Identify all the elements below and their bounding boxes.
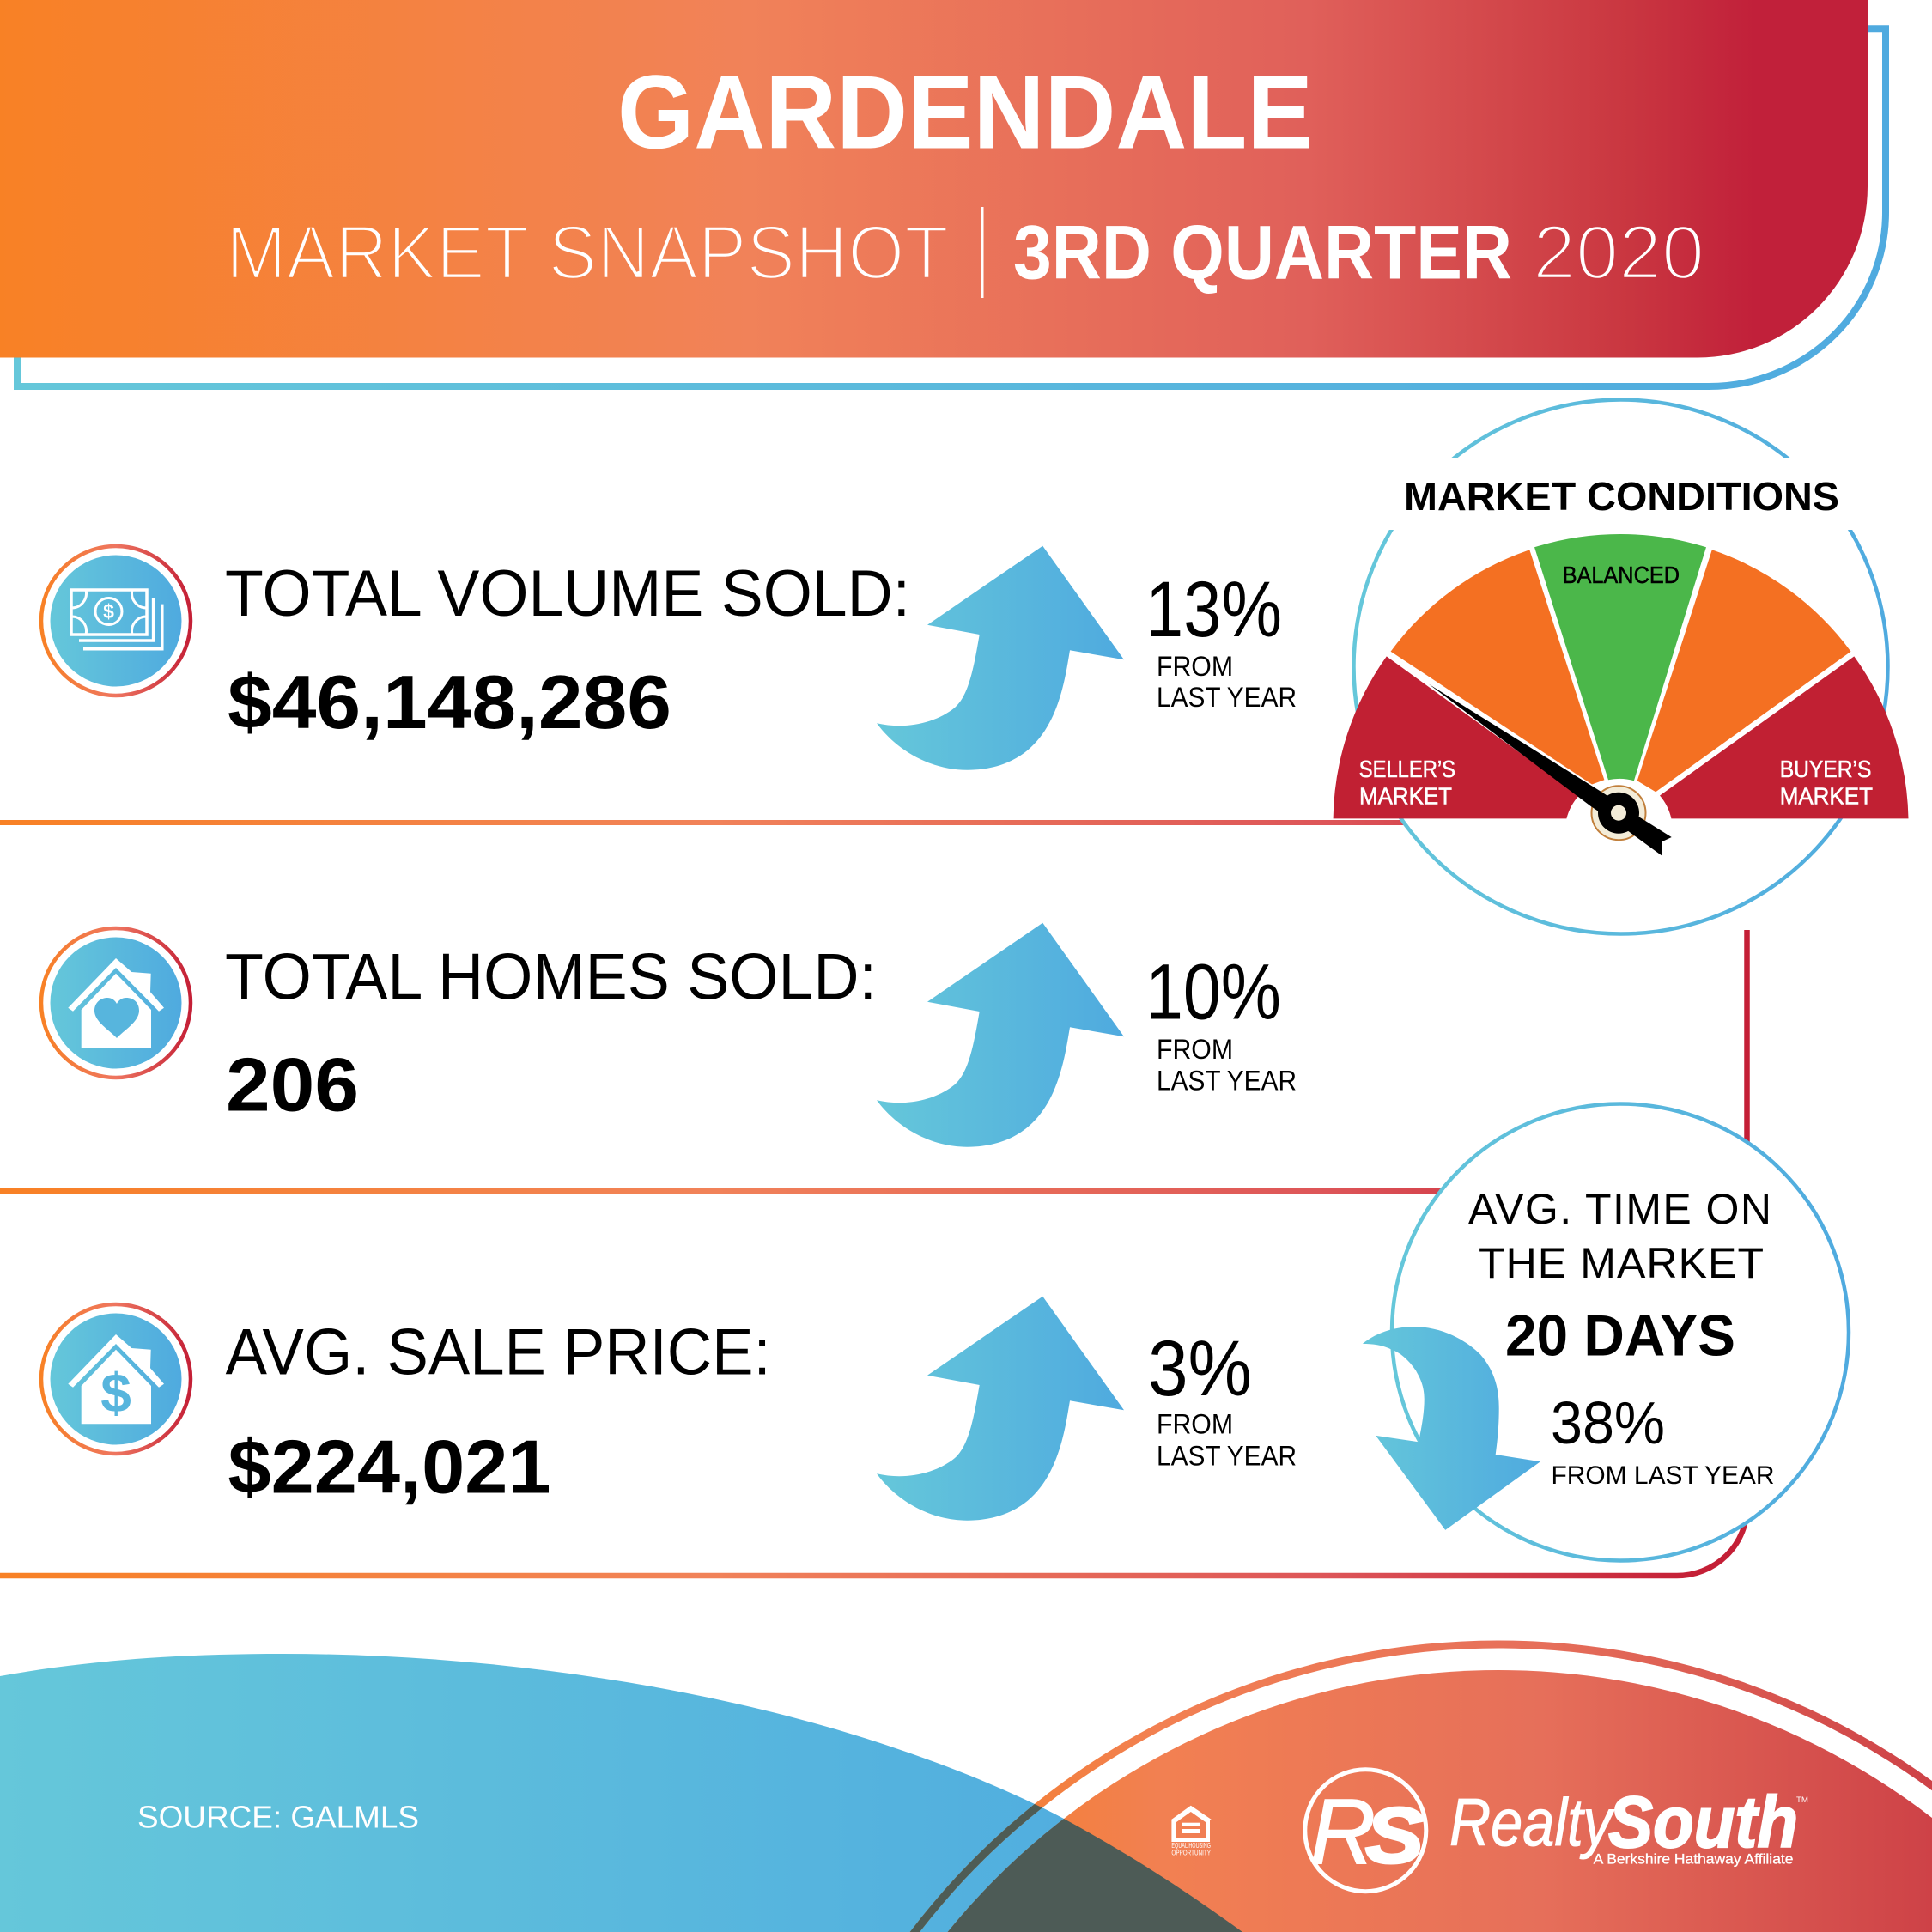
note: from last year bbox=[1157, 651, 1297, 713]
title: GARDENDALE bbox=[617, 53, 1313, 170]
icon: equal housing opportunity: EQUAL HOUSING bbox=[1171, 1842, 1211, 1850]
logo: RealtySouth: Realty bbox=[1449, 1784, 1614, 1860]
gauge ring bbox=[1353, 400, 1887, 934]
header outline: blue frame bbox=[17, 28, 1886, 386]
gauge segment: buyer's market bbox=[1660, 656, 1908, 818]
icon: house with dollar bbox=[41, 1304, 191, 1454]
row: total volume sold bbox=[41, 546, 1297, 770]
note: from last year: LAST YEAR bbox=[1157, 682, 1297, 713]
arrow: up bbox=[877, 1297, 1124, 1521]
logo: RealtySouth: S bbox=[1365, 1792, 1424, 1880]
subtitle: market snapshot: MARKET SNAPSHOT bbox=[226, 210, 949, 295]
footer: dark overlap bbox=[910, 1804, 1242, 1932]
gauge segment: right orange bbox=[1637, 550, 1851, 792]
label: total volume sold: TOTAL VOLUME SOLD: bbox=[225, 557, 910, 630]
footer: blue curved panel bbox=[0, 1654, 1242, 1932]
footer: orange dome bbox=[948, 1670, 1932, 1932]
note: from last year: LAST YEAR bbox=[1157, 1441, 1297, 1472]
note: from last year: FROM bbox=[1157, 1034, 1233, 1065]
note: from last year: FROM bbox=[1157, 1408, 1233, 1439]
header banner bbox=[0, 0, 1868, 357]
gauge segment: left orange bbox=[1391, 550, 1604, 785]
logo: RealtySouth: South bbox=[1608, 1782, 1798, 1862]
logo: RealtySouth: A Berkshire Hathaway Affiliate bbox=[1594, 1851, 1793, 1867]
banner background bbox=[0, 0, 1868, 357]
divider: row 2 bbox=[0, 1188, 1477, 1194]
change: 10 percent: 10% bbox=[1145, 948, 1281, 1036]
note: from last year bbox=[1157, 1408, 1297, 1472]
label: seller's market bbox=[1359, 756, 1455, 809]
change: 38 percent: 38% bbox=[1551, 1389, 1665, 1456]
gauge segment: balanced bbox=[1534, 534, 1706, 781]
divider: row 1 bbox=[0, 820, 1425, 825]
value: average sale price: $224,021 bbox=[228, 1424, 551, 1510]
arrow: up bbox=[877, 923, 1124, 1147]
heading: average time on the market: AVG. TIME ON bbox=[1468, 1185, 1771, 1233]
subtitle divider bbox=[981, 207, 984, 298]
gauge segment: seller's market bbox=[1334, 656, 1579, 818]
label: buyer's market: BUYER’S bbox=[1780, 756, 1871, 782]
label: seller's market: MARKET bbox=[1359, 783, 1452, 809]
divider: row 3 with connector up the right side bbox=[0, 930, 1747, 1576]
source note: SOURCE: GALMLS bbox=[137, 1800, 419, 1834]
note: from last year: FROM bbox=[1157, 651, 1233, 682]
panel: average time on market bbox=[1363, 1104, 1849, 1561]
footer bbox=[0, 1640, 1932, 1932]
note: from last year: FROM LAST YEAR bbox=[1551, 1461, 1774, 1490]
subtitle: year: 2020 bbox=[1533, 210, 1704, 295]
logo: RealtySouth: R bbox=[1310, 1780, 1376, 1884]
callout circle bbox=[1392, 1104, 1849, 1561]
arrow: down bbox=[1363, 1327, 1540, 1530]
change: 13 percent: 13% bbox=[1145, 566, 1282, 653]
icon: money: $ bbox=[103, 600, 114, 623]
logo: RealtySouth: TM bbox=[1796, 1795, 1808, 1804]
label: seller's market: SELLER’S bbox=[1359, 756, 1455, 782]
row: average sale price bbox=[41, 1297, 1297, 1521]
heading: average time on the market: THE MARKET bbox=[1479, 1239, 1764, 1287]
icon: money bbox=[41, 546, 191, 696]
label: total homes sold: TOTAL HOMES SOLD: bbox=[225, 941, 877, 1013]
label: average sale price: AVG. SALE PRICE: bbox=[226, 1315, 771, 1389]
arrow: up bbox=[877, 546, 1124, 770]
subtitle: 3rd quarter: 3RD QUARTER bbox=[1013, 210, 1512, 295]
row: total homes sold bbox=[41, 923, 1297, 1147]
heading: average time on the market bbox=[1468, 1185, 1771, 1287]
panel: market conditions gauge bbox=[1334, 400, 1908, 934]
icon: house with dollar: $ bbox=[100, 1362, 131, 1424]
gauge heading: MARKET CONDITIONS bbox=[1404, 474, 1839, 519]
label: balanced: BALANCED bbox=[1563, 562, 1680, 588]
icon: equal housing opportunity bbox=[1170, 1806, 1212, 1856]
icon: equal housing opportunity: OPPORTUNITY bbox=[1171, 1850, 1212, 1856]
gauge needle and hub bbox=[1429, 684, 1672, 856]
change: 3 percent: 3% bbox=[1148, 1325, 1252, 1413]
note: from last year: LAST YEAR bbox=[1157, 1065, 1297, 1096]
logo: RealtySouth bbox=[1305, 1770, 1808, 1892]
value: 20 days: 20 DAYS bbox=[1505, 1303, 1735, 1369]
icon: house with heart bbox=[41, 928, 191, 1078]
value: total homes: 206 bbox=[226, 1042, 359, 1127]
value: total volume: $46,148,286 bbox=[228, 659, 671, 744]
note: from last year bbox=[1157, 1034, 1297, 1096]
footer: orange arc line bbox=[910, 1640, 1932, 1932]
label: buyer's market: MARKET bbox=[1780, 783, 1873, 809]
label: buyer's market bbox=[1780, 756, 1873, 809]
